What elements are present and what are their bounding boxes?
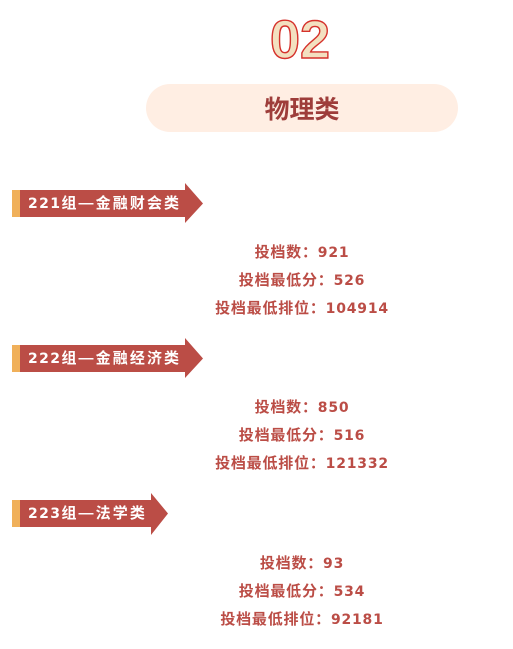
data: 222 — [215, 399, 389, 472]
data: 222: 投档最低分：516 — [239, 427, 365, 444]
data: 221 — [215, 244, 389, 317]
heading pill: 物理类 — [146, 84, 458, 132]
heading pill: 物理类: 物理类 — [264, 96, 340, 124]
group arrow: 221 — [12, 183, 203, 223]
group arrow: 222 — [12, 338, 203, 378]
data: 222: 投档数：850 — [255, 399, 349, 416]
data: 221: 投档最低分：526 — [239, 272, 365, 289]
data: 223 — [220, 555, 384, 628]
data: 221: 投档最低排位：104914 — [215, 300, 389, 317]
data: 223: 投档数：93 — [260, 555, 344, 572]
group arrow: 223 — [12, 493, 168, 535]
group arrow: 222: 222组—金融经济类 — [28, 350, 181, 367]
data: 222: 投档最低排位：121332 — [215, 455, 389, 472]
group arrow: 221: 221组—金融财会类 — [28, 195, 181, 212]
data: 223: 投档最低分：534 — [239, 583, 365, 600]
data: 223: 投档最低排位：92181 — [220, 611, 384, 628]
group arrow: 223: 223组—法学类 — [28, 505, 147, 522]
data: 221: 投档数：921 — [255, 244, 349, 261]
